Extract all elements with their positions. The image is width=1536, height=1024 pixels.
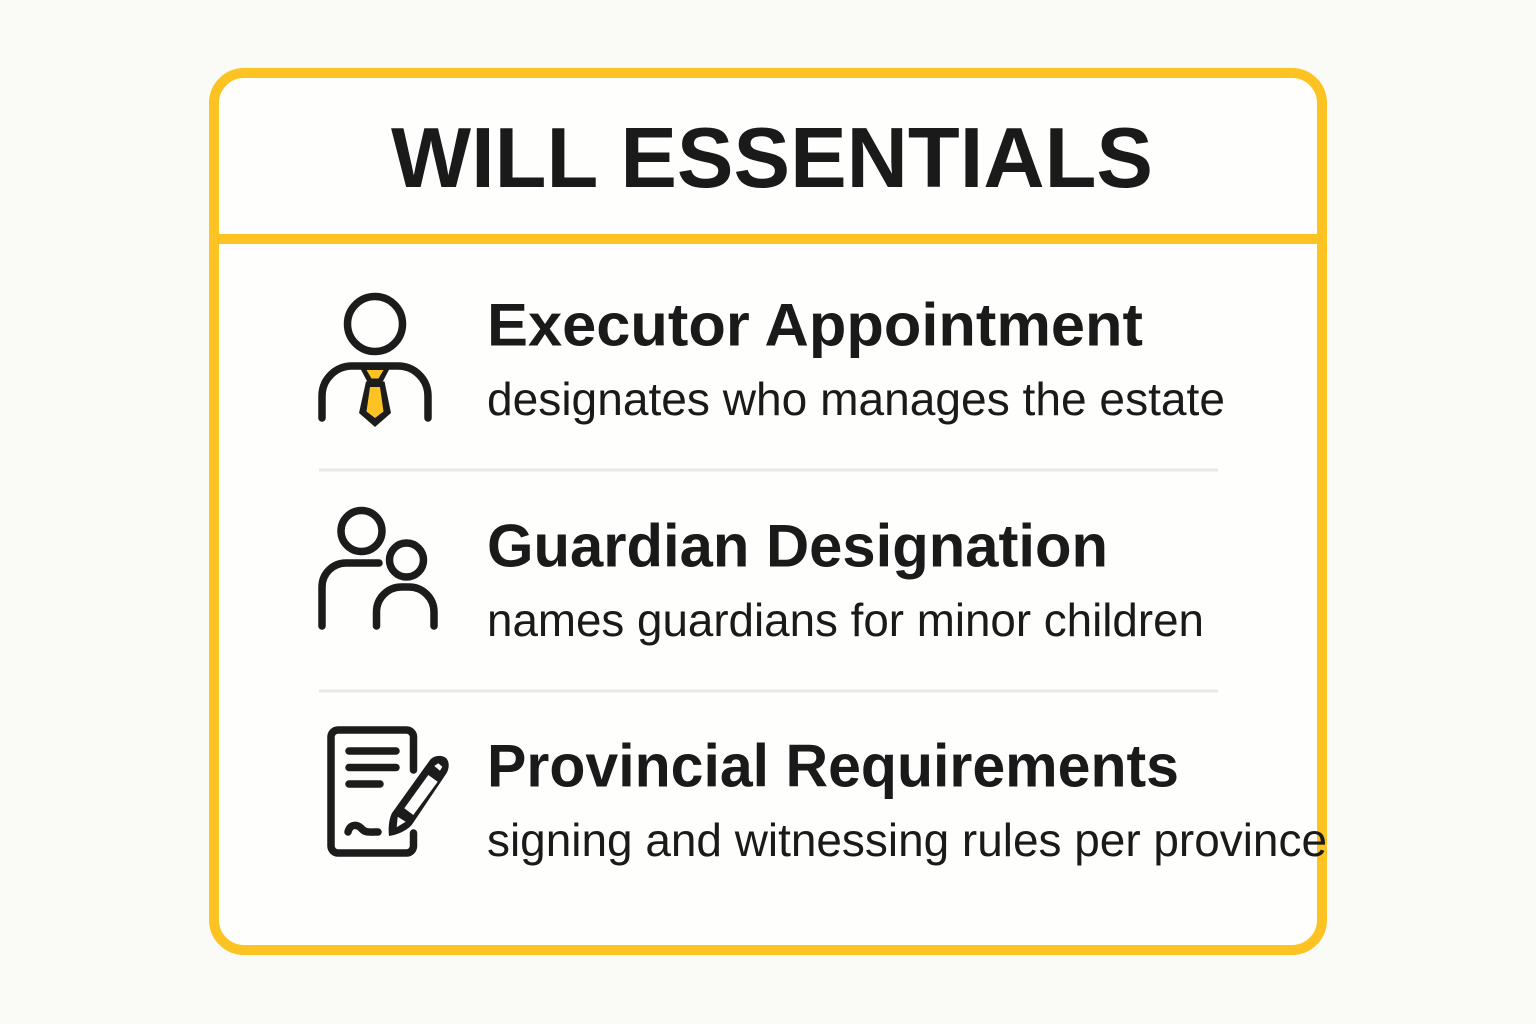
- text: provincial description: signing and witnessing rules per province: [487, 814, 1327, 866]
- heading: guardian designation: Guardian Designation: [487, 512, 1108, 580]
- row: provincial requirements: [331, 730, 1327, 866]
- heading: executor appointment: Executor Appointment: [487, 292, 1143, 358]
- heading: provincial requirements: Provincial Requirements: [487, 732, 1179, 800]
- panel: will essentials card: [214, 73, 1322, 950]
- text: guardian description: names guardians for minor children: [487, 594, 1204, 646]
- row: guardian designation: [322, 510, 1204, 646]
- title: WILL ESSENTIALS: [391, 111, 1153, 206]
- icon: document and pencil: [331, 730, 449, 853]
- icon: person with tie: [322, 296, 428, 427]
- row: executor appointment: [322, 292, 1225, 427]
- text: executor description: designates who manages the estate: [487, 373, 1225, 425]
- icon: adult and child: [322, 510, 434, 626]
